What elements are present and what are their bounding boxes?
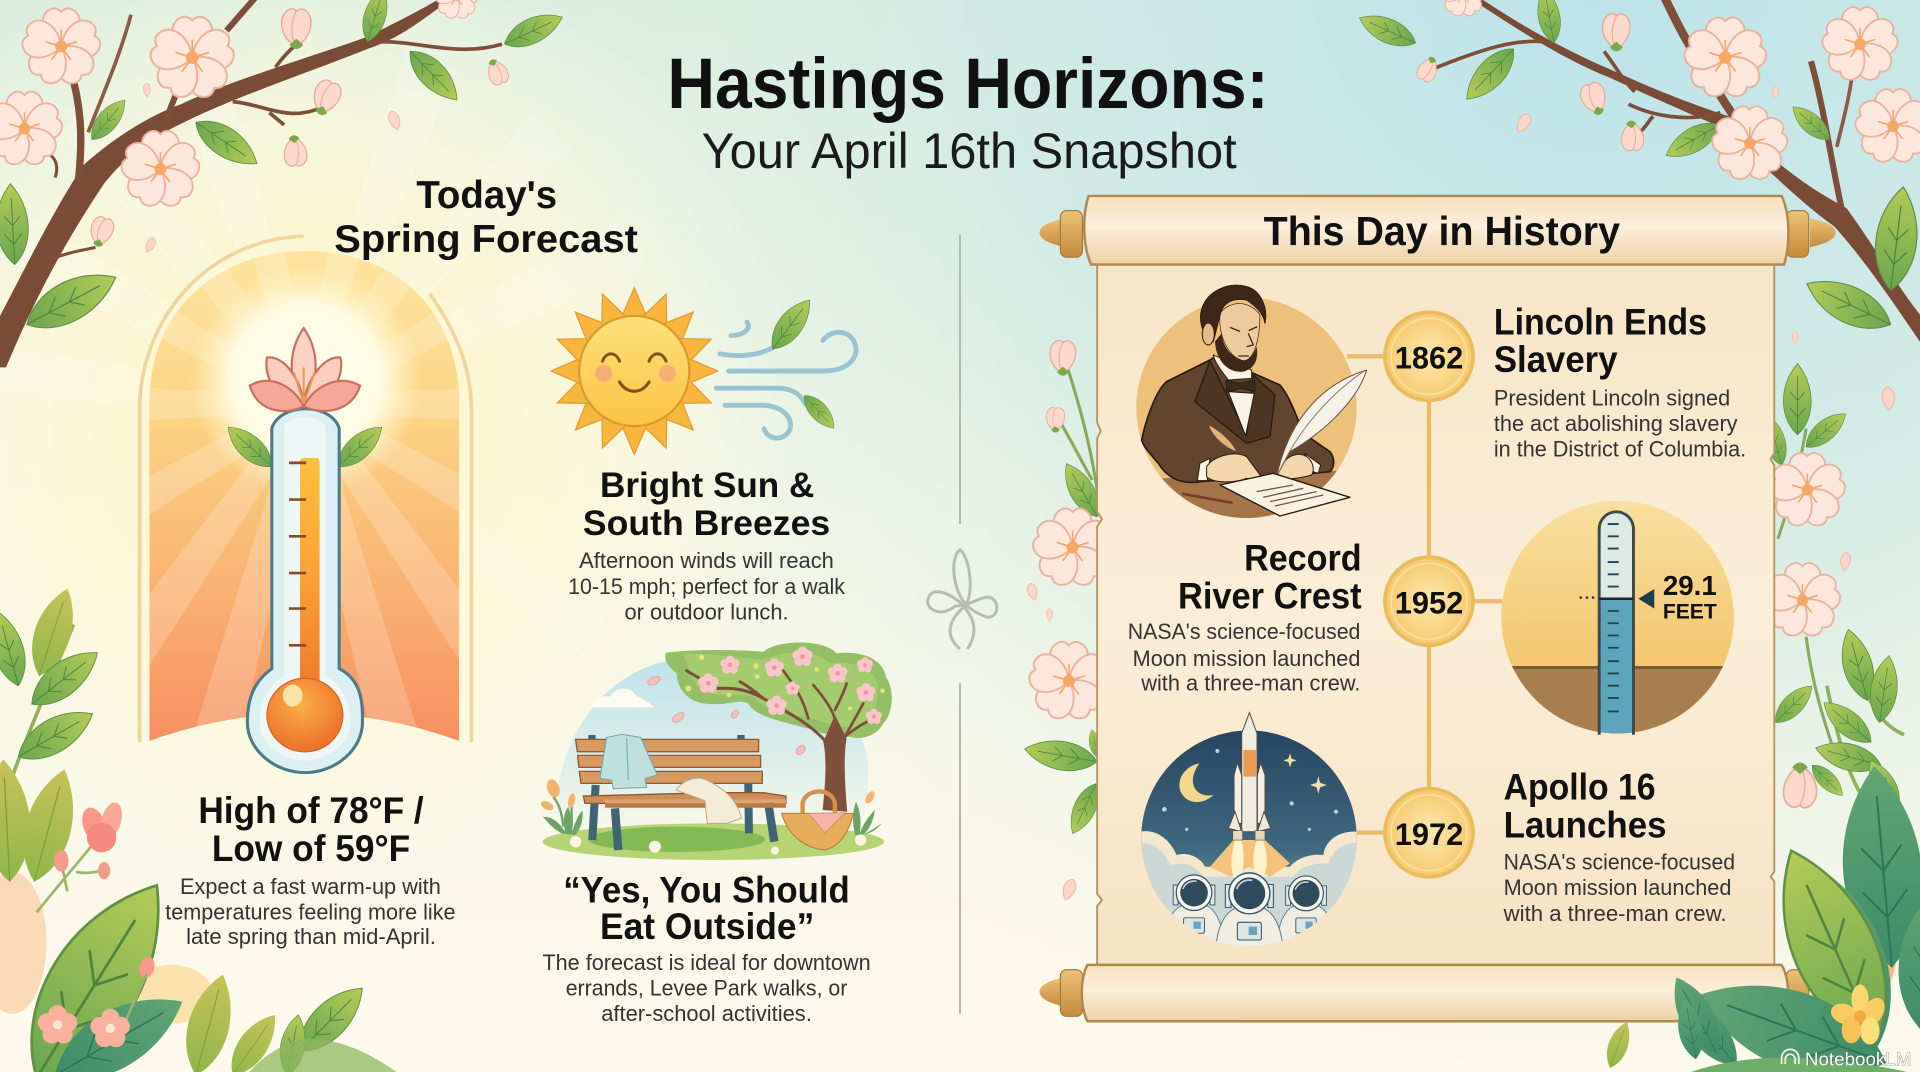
flames [1210,840,1290,877]
text: Lincoln ends slavery: Slavery [1494,339,1618,380]
text: high and low temperature: Expect a fast warm-up with [180,874,441,899]
side florals behind right of scroll [1758,364,1895,808]
text: yes, you should eat outside: after-school activities. [601,1001,812,1026]
cloud [588,689,654,707]
astronauts [1172,874,1223,943]
bench slats [576,739,762,783]
paper [1220,473,1350,516]
panel: temperature arch with thermometer [138,234,474,774]
text: bright sun and south breezes [568,465,846,625]
picnic basket [803,791,835,820]
bottom roller [1040,965,1809,1021]
heading: today's spring forecast: Spring Forecast [334,218,638,261]
right cherry blossom branch [1355,0,1920,349]
towel [676,778,742,823]
illustration: river gauge 29.1 feet: 29.1 [1663,570,1717,601]
hair [1201,285,1266,342]
ticks [289,463,306,645]
bench seat [583,793,786,803]
text: Lincoln ends slavery: Lincoln Ends [1494,301,1707,342]
text: yes, you should eat outside: Eat Outside” [600,906,814,947]
text: Apollo 16 launches: NASA's science-focused [1504,849,1735,874]
text: yes, you should eat outside: The forecast is ideal for downtown [542,950,871,975]
clouds [1141,831,1357,914]
text: bright sun and south breezes: 10-15 mph; perfect for a walk [568,574,846,599]
icon: smiling sun [551,288,718,454]
coral flower [78,800,126,852]
text: bright sun and south breezes: or outdoor lunch. [624,600,789,625]
stars [1283,753,1327,794]
heading: today's spring forecast: Today's [416,174,557,217]
text: bright sun and south breezes: Afternoon winds will reach [579,548,834,573]
scroll paper [1097,262,1774,965]
grass [543,823,884,860]
bow tie [1226,380,1255,393]
timeline line [1347,356,1504,833]
collar [1213,355,1252,380]
text: Apollo 16 launches [1503,767,1735,926]
text: Apollo 16 launches: Apollo 16 [1504,767,1656,808]
text: high and low temperature: late spring than mid-April. [186,924,436,949]
yellow flower dots [685,655,885,710]
lapels [1195,361,1275,443]
jacket [600,734,657,789]
timeline node 1862 [1385,312,1473,400]
thermometer glass [247,409,362,773]
shirt front [1228,392,1254,436]
text: yes, you should eat outside: “Yes, You Should [563,869,850,910]
right cuff and hand [1305,453,1321,473]
arch fill with rays [150,251,460,741]
text: Apollo 16 launches: Moon mission launched [1504,875,1731,900]
text: Lincoln ends slavery: the act abolishing slavery [1494,411,1738,436]
moon [1179,763,1213,802]
pen on table [1183,494,1232,503]
branches [687,671,867,747]
timeline node 1972: 1972 [1395,816,1463,852]
text: high and low temperature: temperatures feeling more like [165,900,456,925]
left cuff and hand [1197,458,1210,481]
illustration: river gauge 29.1 feet: FEET [1663,600,1717,623]
thermometer leaves [220,419,279,475]
timeline node 1952 [1385,557,1473,645]
center divider with ornament [928,235,997,1014]
side florals behind left of scroll [1022,340,1116,902]
mercury [300,458,320,691]
side plants [543,807,583,835]
rocket [1242,713,1257,832]
quill [1277,370,1367,477]
text: Apollo 16 launches: with a three-man crew. [1503,901,1727,926]
panel: this day in history scroll [1040,196,1836,1021]
title: Your April 16th Snapshot [702,123,1237,179]
text: high and low temperature [165,790,456,949]
beard [1215,333,1257,372]
text: Apollo 16 launches: Launches [1504,805,1667,846]
left cherry blossom branch [0,0,567,367]
arch outline [140,236,471,742]
tree crown [665,643,892,738]
text: record river crest: Record [1244,538,1362,579]
illustration: river gauge 29.1 feet [1501,501,1734,736]
timeline node 1952: 1952 [1395,584,1463,620]
text: bright sun and south breezes: Bright Sun & [600,465,814,505]
text: Lincoln ends slavery: in the District of Columbia. [1494,437,1746,462]
suit [1142,357,1334,482]
ear [1202,323,1214,345]
text: record river crest [1128,538,1362,696]
bottom-left foliage [0,583,404,1072]
text: yes, you should eat outside [542,869,871,1026]
text: bright sun and south breezes: South Breezes [583,503,830,543]
text: Lincoln ends slavery [1494,301,1746,462]
illustration: Lincoln signing [1127,285,1371,527]
face [1220,304,1260,361]
text: record river crest: NASA's science-focused [1128,619,1360,644]
timeline node 1862: 1862 [1395,340,1463,376]
illustration: Apollo 16 rocket and crew [1140,713,1360,953]
watermark: NotebookLM: NotebookLM [1805,1048,1911,1069]
text: record river crest: River Crest [1178,576,1362,617]
text: record river crest: Moon mission launched [1133,646,1360,671]
blossoms on tree [720,656,739,674]
illustration: park bench under blossom tree [540,643,892,860]
text: record river crest: with a three-man crew. [1140,671,1360,696]
scroll heading: This Day in History [1264,208,1621,254]
timeline node 1972 [1385,789,1473,877]
text: high and low temperature: Low of 59°F [212,828,410,869]
sky [555,657,868,833]
title [667,45,1269,179]
trunk [823,715,847,812]
heading: today's spring forecast [334,174,638,261]
flower [250,328,360,411]
pen feather [1208,425,1237,452]
bench legs back [592,783,749,840]
ground flowers [570,834,866,855]
top roller [1040,196,1836,264]
title: Hastings Horizons: [667,45,1269,124]
text: yes, you should eat outside: errands, Levee Park walks, or [566,976,847,1001]
bottom-right foliage [1601,626,1920,1072]
icon: south breeze [716,293,856,438]
falling petals [646,675,807,756]
text: high and low temperature: High of 78°F / [198,790,424,831]
text: Lincoln ends slavery: President Lincoln signed [1494,385,1730,410]
